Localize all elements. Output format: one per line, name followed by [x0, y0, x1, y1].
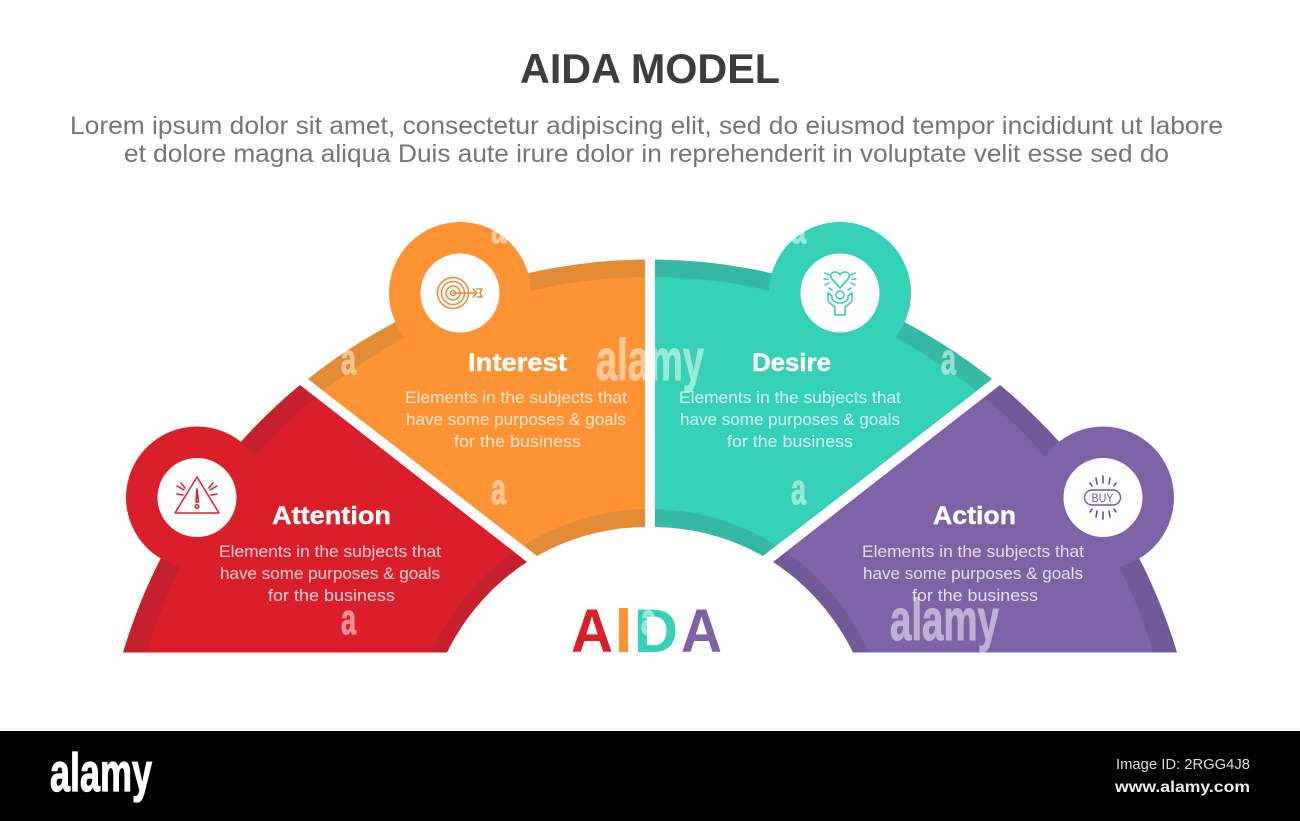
watermarks: a [341, 595, 356, 644]
watermarks: a [491, 204, 506, 253]
icon: warning triangle [175, 477, 219, 513]
text block: attention: for the business [268, 586, 395, 605]
text block: action [862, 542, 1084, 605]
center AIDA logo: A [681, 597, 722, 665]
text block: interest: for the business [454, 432, 581, 451]
title: AIDA MODEL [520, 45, 780, 92]
text block: attention: have some purposes & goals [220, 564, 440, 583]
watermarks: alamy [596, 328, 704, 393]
panel: attention [123, 385, 527, 652]
watermarks: a [791, 204, 806, 253]
icon: buy button [1084, 476, 1120, 519]
watermarks: alamy [890, 588, 999, 653]
heading: attention: Attention [272, 502, 391, 530]
icon: buy button: BUY [1092, 493, 1114, 505]
text block: action: Elements in the subjects that [862, 542, 1084, 561]
watermarks: a [941, 335, 956, 384]
center AIDA logo: A [571, 597, 613, 665]
text block: action: for the business [912, 586, 1038, 605]
panel: interest [308, 222, 645, 556]
text block: interest: have some purposes & goals [406, 410, 626, 429]
text block: desire: Elements in the subjects that [679, 388, 901, 407]
watermarks [341, 204, 999, 653]
panel: desire [655, 222, 992, 556]
subtitle text block: Lorem ipsum dolor sit amet, consectetur adipiscing elit, sed do eiusmod tempor incididunt ut labore [70, 112, 1223, 140]
text block: desire [679, 388, 901, 451]
text block: attention: Elements in the subjects that [219, 542, 441, 561]
text block: action: have some purposes & goals [863, 564, 1083, 583]
watermarks: a [341, 335, 356, 384]
heading: action: Action [933, 502, 1016, 530]
subtitle text block: et dolore magna aliqua Duis aute irure dolor in reprehenderit in voluptate velit esse sed do [124, 140, 1169, 168]
subtitle text block [70, 112, 1223, 168]
heading: desire: Desire [752, 349, 831, 377]
text block: desire: for the business [727, 432, 853, 451]
footer bar [0, 731, 1300, 821]
footer logo: alamy [50, 743, 152, 803]
text block: interest: Elements in the subjects that [405, 388, 627, 407]
watermarks: a [491, 465, 506, 514]
panel: action [773, 385, 1177, 652]
center AIDA logo [571, 597, 722, 665]
icon: person holding heart [824, 272, 856, 315]
center AIDA logo: D [634, 597, 678, 665]
website: www.alamy.com [1114, 779, 1250, 796]
text block: interest [405, 388, 627, 451]
text block: attention [219, 542, 441, 605]
text block: desire: have some purposes & goals [680, 410, 900, 429]
icon: target with arrow [438, 278, 482, 308]
watermarks: a [641, 595, 656, 644]
heading: interest: Interest [468, 349, 568, 377]
image id: Image ID: 2RGG4J8 [1116, 757, 1250, 773]
watermarks: a [791, 465, 806, 514]
